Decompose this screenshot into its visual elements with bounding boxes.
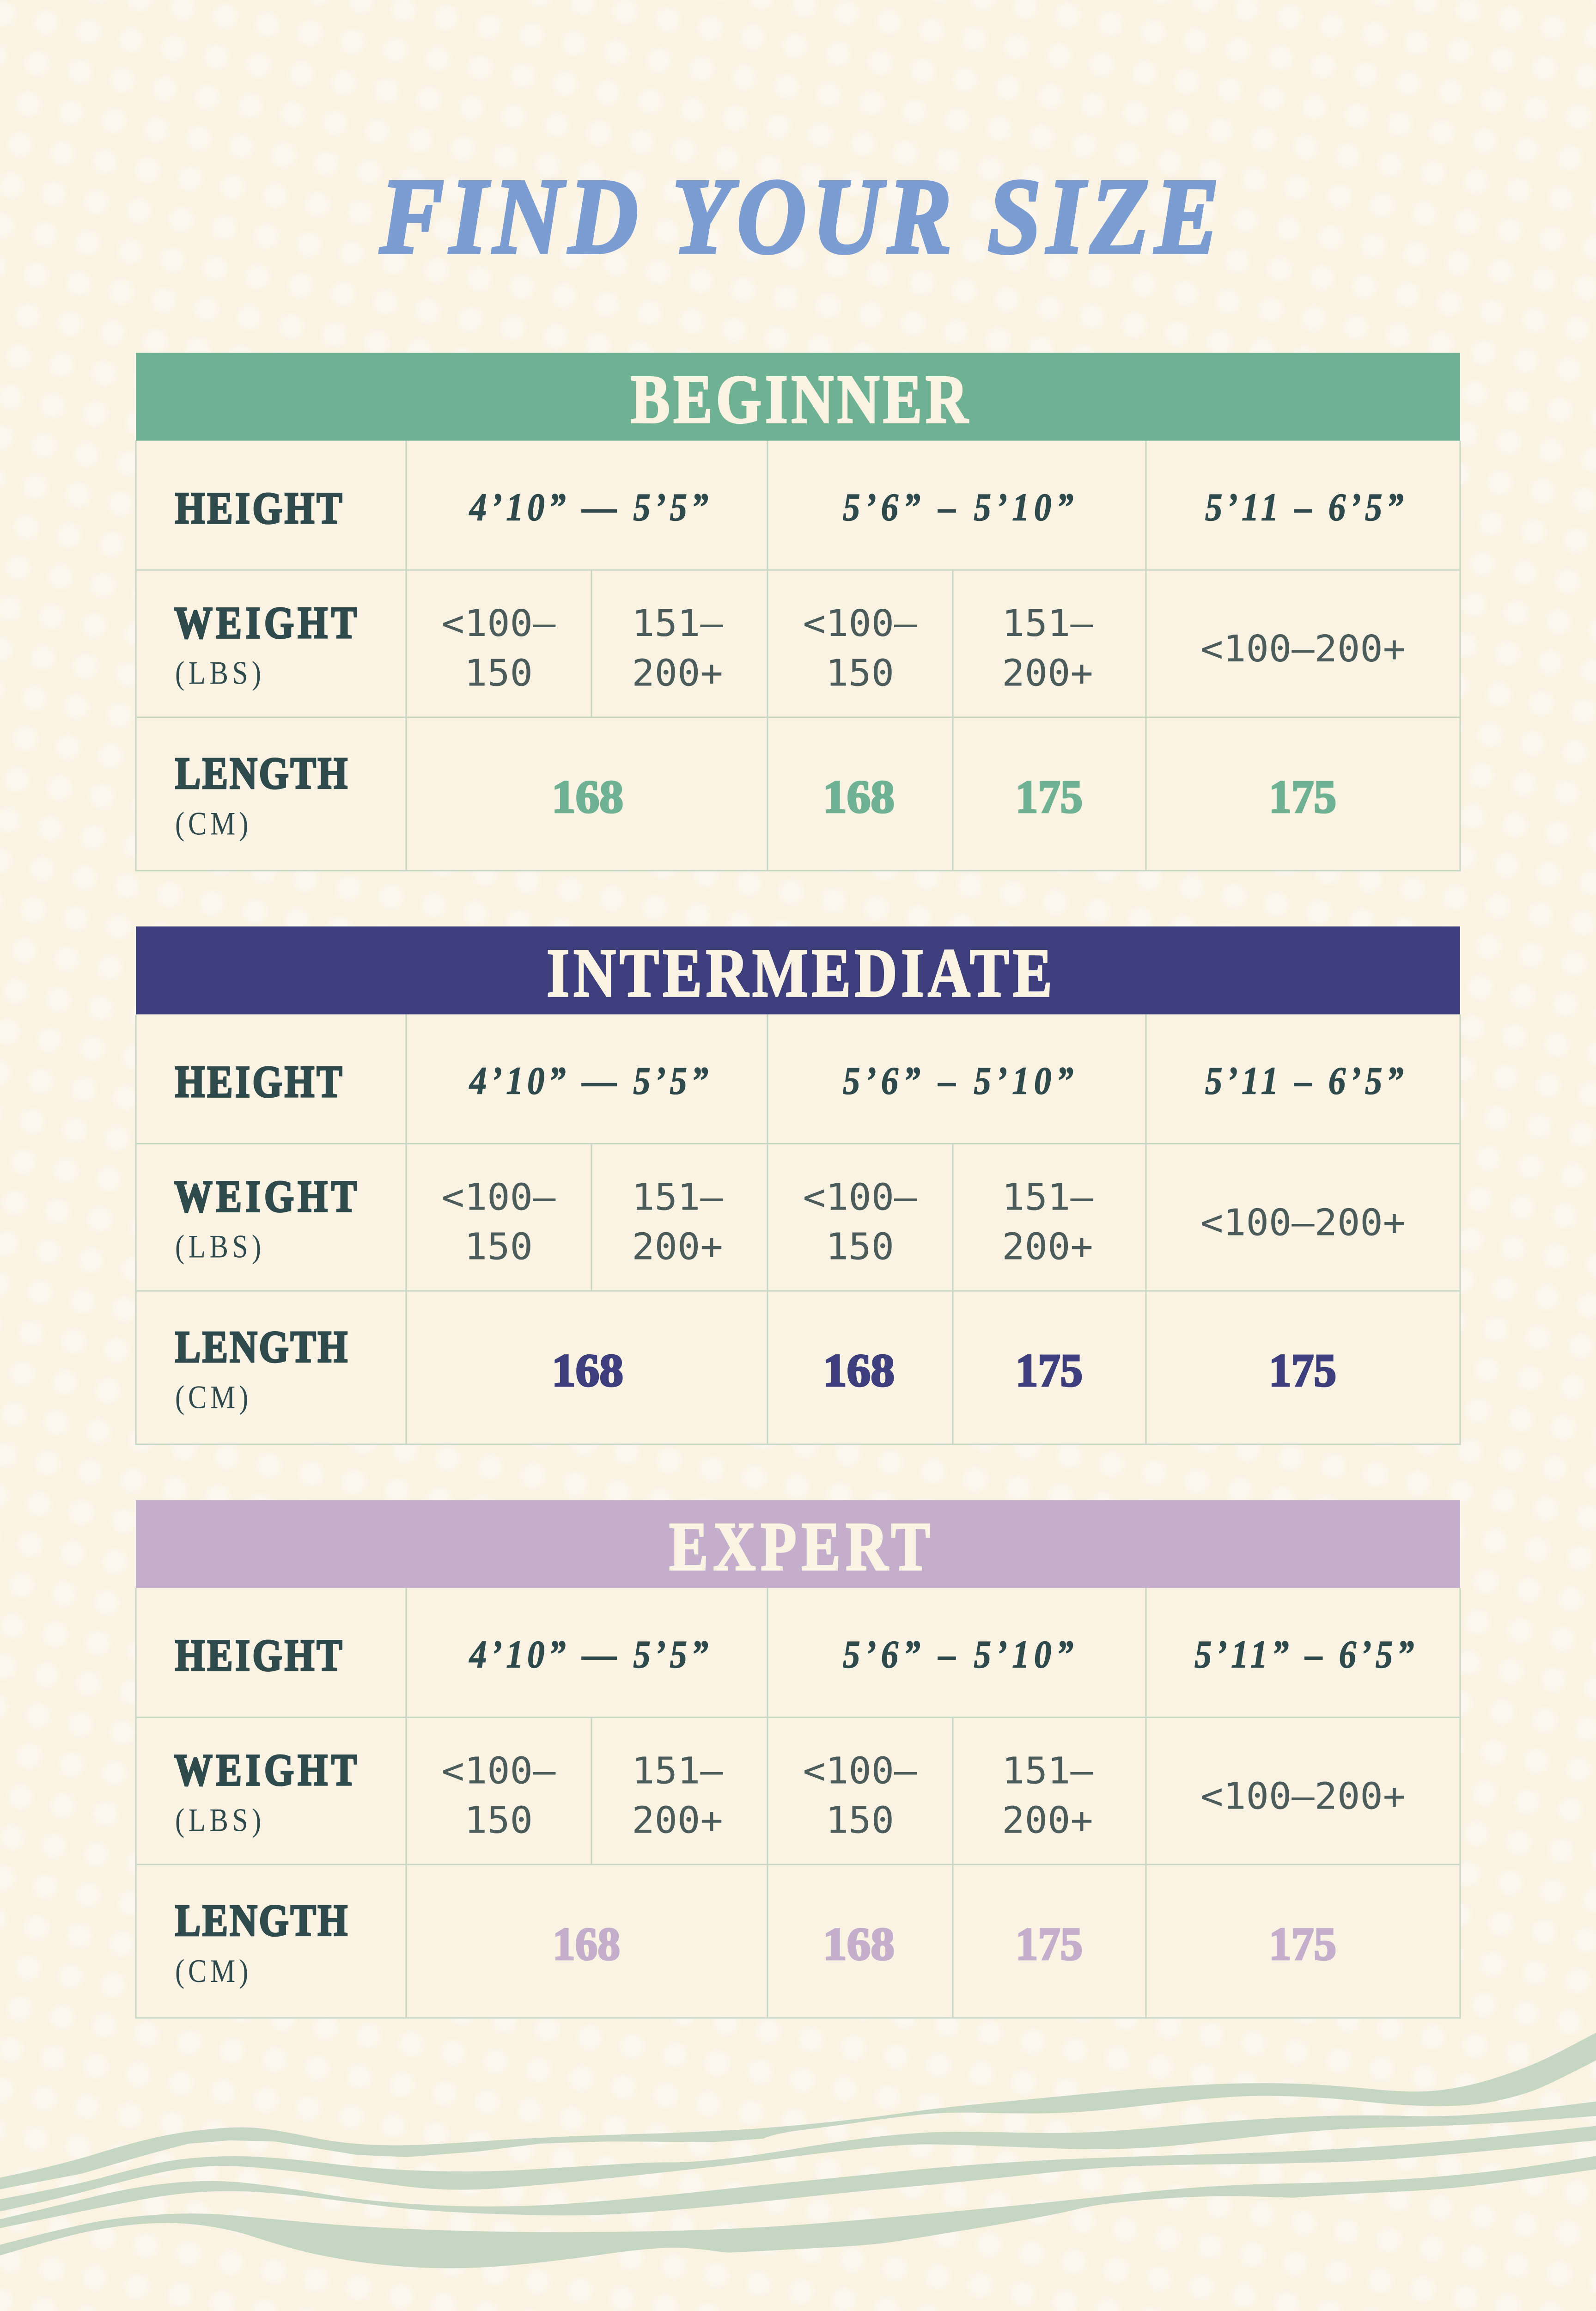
row: weight: <100– (442, 1750, 556, 1792)
panel: expert size table (136, 1500, 1460, 2018)
row: height: 5’6” – 5’10” (843, 1633, 1073, 1676)
row: weight: WEIGHT (174, 598, 357, 648)
row: weight: 200+ (632, 1799, 723, 1842)
row: length: 168 (823, 1345, 895, 1396)
table background and grid (136, 353, 1460, 871)
row: length: (CM) (175, 1379, 248, 1416)
row: height: 4’10” — 5’5” (469, 1633, 708, 1676)
title: FIND YOUR SIZE (379, 156, 1219, 276)
row: weight: 200+ (1002, 652, 1093, 695)
row: weight (174, 598, 1406, 695)
row: weight: 150 (826, 1799, 894, 1842)
heading banner: expert: EXPERT (669, 1509, 930, 1585)
row: length: 168 (552, 771, 623, 823)
row: length: 168 (553, 1919, 620, 1970)
row: height: 5’6” – 5’10” (843, 1059, 1073, 1102)
row: weight (174, 1745, 1406, 1842)
row: weight: 200+ (1002, 1799, 1093, 1842)
row: length: 175 (1016, 771, 1083, 823)
panel: beginner size table (136, 353, 1460, 871)
row: height: 4’10” — 5’5” (469, 1059, 708, 1102)
row: length: 168 (823, 1919, 895, 1970)
row: weight: 200+ (632, 1226, 723, 1268)
row: length: 175 (1269, 771, 1336, 823)
row: weight: <100– (442, 1176, 556, 1219)
row: length (175, 1321, 1336, 1416)
row: length: 168 (823, 771, 895, 823)
row: weight: 150 (464, 1226, 533, 1268)
row: length: 168 (552, 1345, 623, 1396)
row: weight: <100–200+ (1200, 1775, 1406, 1818)
row: weight: 151– (632, 1750, 723, 1792)
row: weight: <100–200+ (1200, 628, 1406, 671)
table background and grid (136, 1500, 1460, 2018)
row: length: 175 (1016, 1919, 1083, 1970)
decorative green waves (0, 2033, 1596, 2268)
heading banner: intermediate: INTERMEDIATE (547, 935, 1052, 1011)
row: length: (CM) (175, 806, 248, 842)
row: weight: WEIGHT (174, 1171, 357, 1222)
heading banner: beginner: BEGINNER (631, 361, 969, 438)
row: length (175, 748, 1336, 842)
row: length: LENGTH (175, 748, 347, 798)
row: weight: 150 (826, 652, 894, 695)
row: weight: 151– (1002, 603, 1093, 645)
row: weight: 150 (826, 1226, 894, 1268)
row: weight: (LBS) (175, 1802, 261, 1839)
row: weight: WEIGHT (174, 1745, 357, 1795)
panel: intermediate size table (136, 926, 1460, 1444)
row: length: 175 (1269, 1345, 1336, 1396)
row: weight: 151– (632, 1176, 723, 1219)
row: height (175, 1057, 1403, 1107)
row: weight: <100– (803, 603, 917, 645)
row: weight: 151– (632, 603, 723, 645)
row: height: 5’11 – 6’5” (1205, 486, 1403, 529)
row: length: LENGTH (175, 1895, 347, 1945)
row: weight: 150 (464, 1799, 533, 1842)
row: length: 175 (1269, 1919, 1336, 1970)
heading banner: expert (136, 1500, 1460, 1588)
row: height (175, 1630, 1414, 1681)
row: height (175, 483, 1403, 533)
row: height: 4’10” — 5’5” (469, 486, 708, 529)
row: length: 175 (1016, 1345, 1083, 1396)
row: height: 5’11” – 6’5” (1194, 1633, 1414, 1676)
row: height: HEIGHT (175, 483, 342, 533)
row: weight: 151– (1002, 1176, 1093, 1219)
row: length: (CM) (175, 1953, 248, 1989)
heading banner: intermediate (136, 926, 1460, 1015)
heading banner: beginner (136, 353, 1460, 440)
row: weight: 200+ (1002, 1226, 1093, 1268)
row: height: HEIGHT (175, 1057, 342, 1107)
row: length: LENGTH (175, 1321, 347, 1372)
row: length (175, 1895, 1336, 1989)
row: weight: 150 (464, 652, 533, 695)
row: weight: (LBS) (175, 1229, 261, 1265)
row: weight: <100– (442, 603, 556, 645)
row: weight (174, 1171, 1406, 1268)
row: weight: (LBS) (175, 655, 261, 691)
row: height: 5’11 – 6’5” (1205, 1059, 1403, 1102)
row: weight: <100– (803, 1750, 917, 1792)
row: height: HEIGHT (175, 1630, 342, 1681)
row: weight: <100–200+ (1200, 1202, 1406, 1244)
row: height: 5’6” – 5’10” (843, 486, 1073, 529)
table background and grid (136, 926, 1460, 1444)
row: weight: <100– (803, 1176, 917, 1219)
row: weight: 200+ (632, 652, 723, 695)
row: weight: 151– (1002, 1750, 1093, 1792)
